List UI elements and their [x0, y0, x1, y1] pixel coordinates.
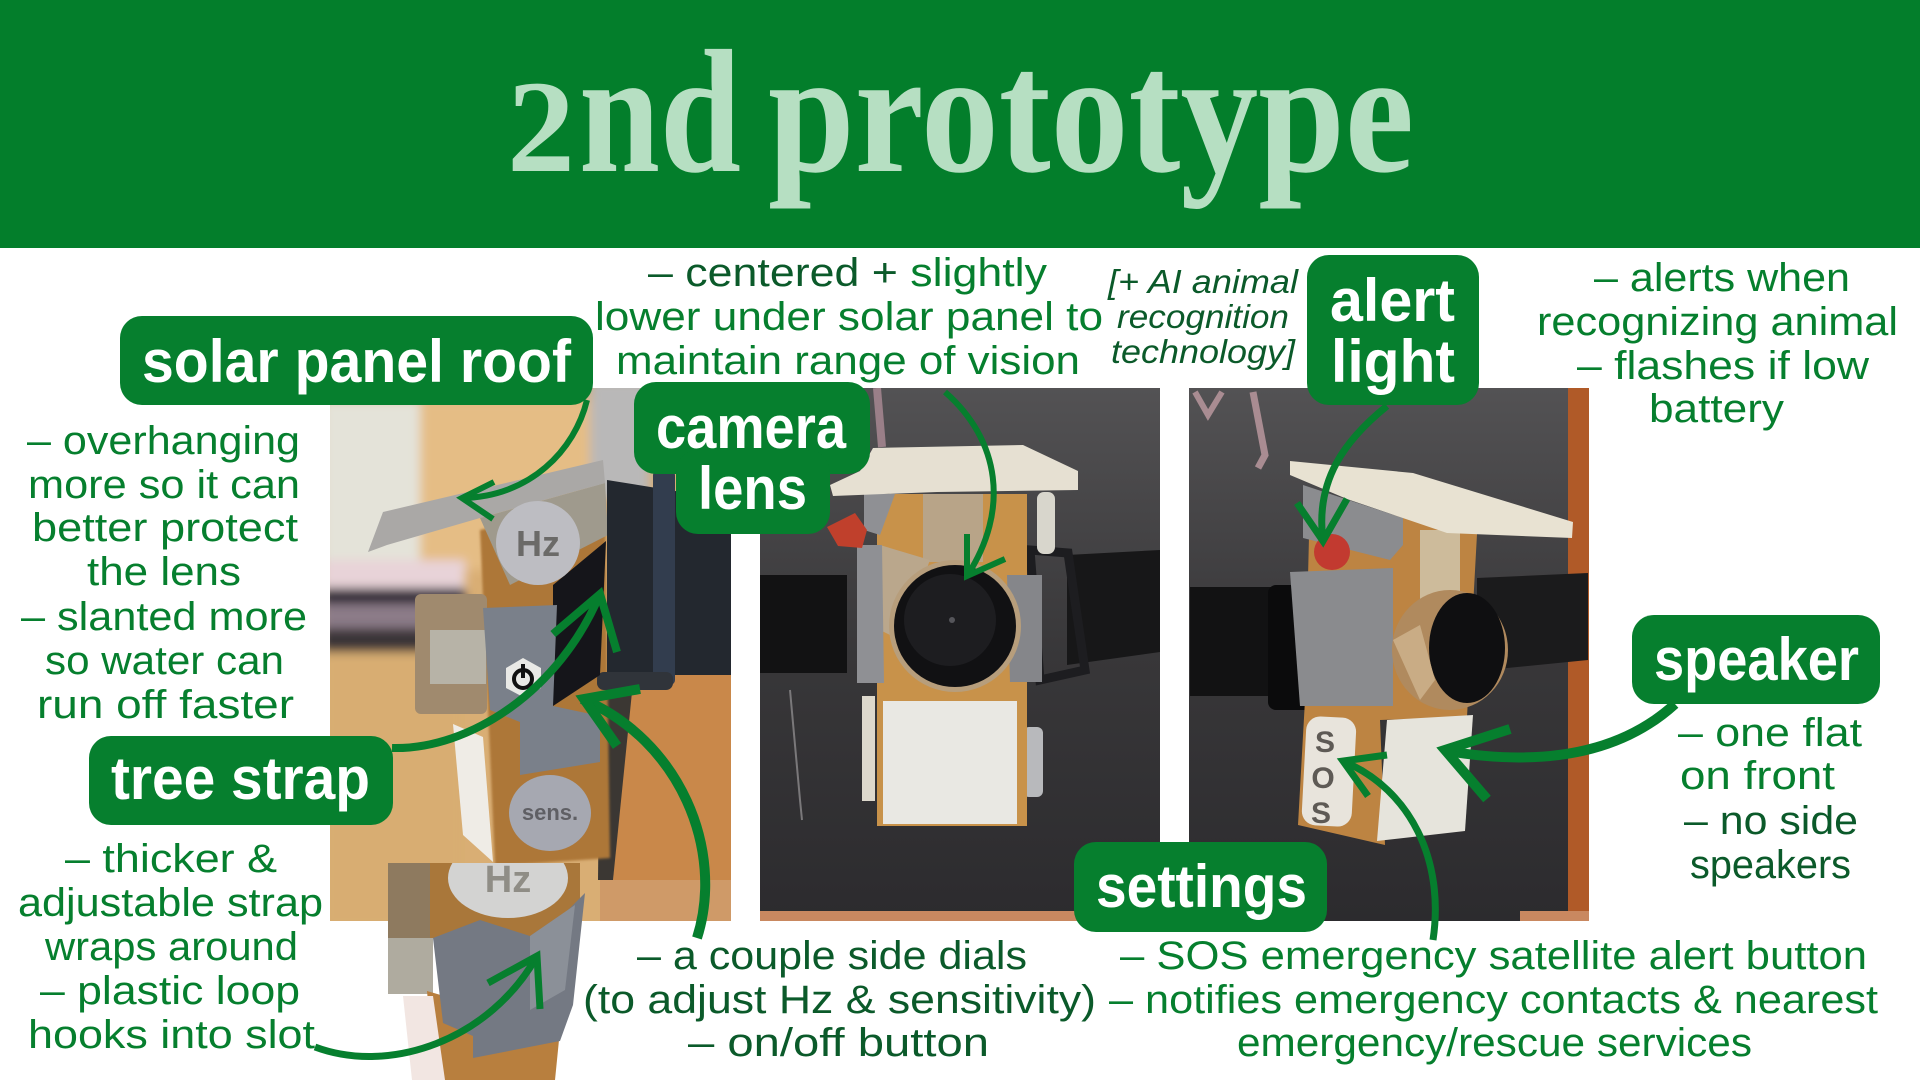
text: dial and button notes: (to adjust Hz & sensitivity): [583, 978, 1096, 1022]
tube with lens: [1392, 530, 1508, 710]
photo: velcro loop close-up: [388, 863, 585, 1080]
straps: [760, 575, 847, 673]
power button: [506, 658, 541, 697]
arrow: side dials: [582, 689, 705, 938]
solar roof front: [830, 445, 1078, 496]
text: settings notes: – SOS emergency satellite alert button: [1120, 934, 1867, 978]
text: alert light notes: – alerts when: [1594, 256, 1850, 300]
arrow: SOS button: [1343, 755, 1435, 940]
text: solar panel roof notes: [21, 419, 307, 727]
SOS button: [1301, 716, 1357, 830]
wood body: [877, 494, 1027, 826]
Hz dial: Hz: [516, 523, 560, 564]
SOS button: S: [1311, 797, 1331, 830]
straps: [1190, 587, 1270, 696]
solar roof side: [368, 460, 605, 552]
arrow: plastic loop: [315, 956, 540, 1056]
text: AI recognition note: technology]: [1111, 333, 1296, 370]
text: solar panel roof notes: more so it can: [28, 463, 300, 507]
photo: side view of prototype: [322, 380, 731, 930]
title: prototype: [768, 15, 1414, 210]
text: AI recognition note: recognition: [1117, 298, 1289, 335]
text: camera lens notes: lower under solar panel to: [595, 295, 1103, 339]
arrow: camera lens: [945, 392, 1005, 576]
dials and side panel: [1037, 492, 1055, 554]
white speaker box: [1377, 715, 1473, 841]
label: camera lens: camera: [656, 394, 847, 461]
lens: [889, 560, 1021, 692]
white speaker side: [453, 724, 493, 862]
label: alert light: light: [1331, 328, 1455, 395]
photo: front view of prototype: [760, 388, 1160, 921]
tape: [857, 545, 884, 683]
text: alert light notes: battery: [1649, 387, 1784, 431]
label: tree strap: [89, 736, 393, 825]
text: tree strap notes: [18, 837, 323, 1057]
label: alert light: [1307, 255, 1479, 405]
text: tree strap notes: hooks into slot: [28, 1013, 315, 1057]
label: camera lens: lens: [698, 455, 807, 522]
white speaker box: [883, 701, 1017, 824]
tape: [1303, 485, 1403, 560]
arrow: speaker: [1445, 704, 1675, 799]
title: nd: [579, 15, 741, 210]
text: speaker notes: on front: [1680, 754, 1835, 798]
text: solar panel roof notes: the lens: [87, 550, 241, 594]
text: settings notes: – notifies emergency contacts & nearest: [1109, 978, 1878, 1022]
text: speaker notes: – no side: [1684, 799, 1858, 843]
text: alert light notes: – flashes if low: [1577, 344, 1869, 388]
text: camera lens notes: [595, 251, 1103, 383]
label: solar panel roof: solar panel roof: [142, 328, 572, 395]
text: tree strap notes: adjustable strap: [18, 881, 323, 925]
photo: angled view of prototype: [1189, 388, 1589, 921]
text: settings notes: emergency/rescue services: [1237, 1021, 1752, 1065]
photo: velcro loop close-up: Hz: [485, 859, 531, 901]
red light: [1314, 534, 1350, 570]
text: settings notes: [1109, 934, 1878, 1065]
text: AI recognition note: [+ AI animal: [1107, 263, 1300, 300]
solar roof angled: [1290, 461, 1573, 538]
cardboard tube: [415, 594, 487, 714]
text: AI recognition note: [1107, 263, 1300, 370]
sens dial: [509, 775, 591, 851]
SOS button: O: [1311, 762, 1335, 795]
text: solar panel roof notes: – overhanging: [27, 419, 300, 463]
red light: [827, 513, 867, 548]
text: dial and button notes: – a couple side dials: [637, 934, 1027, 978]
label: speaker: speaker: [1654, 626, 1859, 693]
label: speaker: [1632, 615, 1880, 704]
label: alert light: alert: [1330, 267, 1455, 334]
label: settings: settings: [1096, 853, 1307, 920]
text: alert light notes: recognizing animal: [1537, 300, 1898, 344]
text: camera lens notes: – centered + slightly: [648, 251, 1047, 295]
strap: [553, 470, 731, 706]
label: settings: [1074, 842, 1327, 932]
text: speaker notes: – one flat: [1678, 711, 1862, 755]
arrow: tree strap: [392, 594, 617, 748]
duct tape: [483, 605, 600, 775]
text: speaker notes: [1678, 711, 1862, 887]
text: tree strap notes: – thicker &: [65, 837, 277, 881]
arrow: alert light: [1297, 406, 1387, 541]
sens dial: sens.: [522, 800, 578, 825]
text: solar panel roof notes: better protect: [32, 506, 298, 550]
label: tree strap: tree strap: [111, 745, 370, 812]
text: solar panel roof notes: – slanted more: [21, 595, 307, 639]
text: tree strap notes: wraps around: [44, 925, 298, 969]
title: 2: [507, 53, 575, 200]
arrow: solar panel roof: [462, 400, 587, 519]
text: alert light notes: [1537, 256, 1898, 431]
text: speaker notes: speakers: [1690, 843, 1851, 887]
text: solar panel roof notes: so water can: [45, 639, 284, 683]
header banner: [0, 0, 1920, 248]
text: solar panel roof notes: run off faster: [37, 683, 294, 727]
SOS button: S: [1315, 726, 1335, 759]
text: camera lens notes: maintain range of vision: [616, 339, 1080, 383]
wood body: [1298, 496, 1477, 845]
title: [507, 15, 1414, 210]
label: camera lens: [634, 382, 870, 534]
text: dial and button notes: [583, 934, 1096, 1065]
text: dial and button notes: – on/off button: [688, 1021, 989, 1065]
Hz dial: [496, 501, 580, 585]
wood body: [480, 500, 610, 866]
text: tree strap notes: – plastic loop: [40, 969, 300, 1013]
